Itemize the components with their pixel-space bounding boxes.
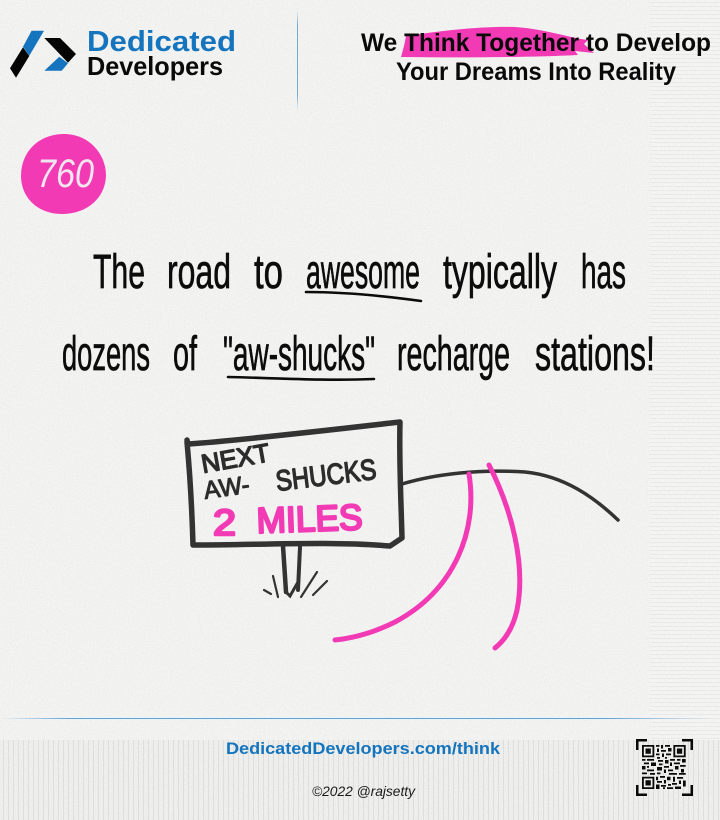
sign text: SHUCKS: [274, 454, 378, 498]
footer link: DedicatedDevelopers.com/think: [226, 740, 501, 758]
copyright: ©2022 @rajsetty: [312, 783, 416, 799]
road: [335, 465, 618, 648]
sign text: MILES: [256, 496, 363, 541]
sign text: NEXT: [199, 437, 272, 479]
number badge: [21, 134, 106, 214]
grass: [264, 572, 327, 597]
underline: aw-shucks: [228, 377, 374, 380]
logo mark: [10, 31, 76, 78]
headline line 1: awesome: [306, 246, 420, 299]
footer rule: [0, 718, 712, 719]
logo: [10, 26, 236, 81]
headline line 1: has: [581, 246, 626, 299]
headline line 1: The: [93, 246, 145, 299]
logo wordmark: Dedicated: [87, 26, 236, 58]
underline: awesome: [306, 292, 421, 301]
headline line 2: of: [173, 328, 197, 381]
sign text: [199, 437, 378, 543]
headline line 2: stations!: [535, 328, 655, 381]
QR code: [636, 739, 693, 796]
headline line 1: typically: [443, 246, 557, 299]
sign text: AW-: [202, 471, 251, 505]
sign post: [283, 546, 300, 596]
tagline: [361, 27, 711, 86]
sign text: 2: [213, 502, 236, 543]
headline line 2: [62, 328, 655, 381]
QR frame corners: [636, 739, 693, 796]
tagline text: Your Dreams Into Reality: [396, 58, 676, 86]
headline line 2: dozens: [62, 328, 150, 381]
header divider: [297, 10, 298, 110]
illustration: road sign and road: [187, 422, 618, 648]
headline line 1: to: [254, 246, 283, 299]
logo wordmark: [87, 26, 236, 81]
QR finder patterns: [642, 745, 686, 789]
tagline text: We Think Together to Develop: [361, 29, 711, 57]
logo wordmark: Developers: [87, 51, 223, 81]
tagline text: [361, 29, 711, 86]
headline: [62, 246, 655, 381]
brush highlight: [401, 27, 594, 57]
headline line 2: "aw-shucks": [223, 328, 375, 381]
headline line 2: recharge: [397, 328, 510, 381]
headline line 1: [93, 246, 626, 299]
QR modules: [642, 745, 686, 789]
sign board: [187, 422, 402, 546]
number badge: 760: [37, 152, 94, 196]
headline line 1: road: [167, 246, 231, 299]
